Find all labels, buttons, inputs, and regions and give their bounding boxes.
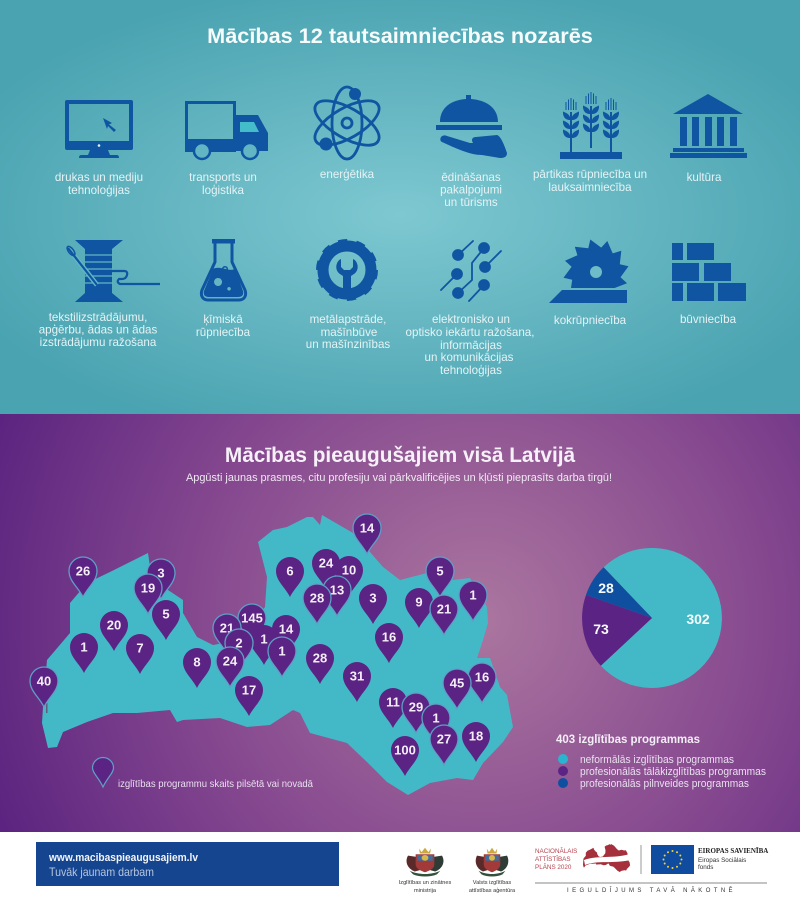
- label: electronics and ICT: tehnoloģijas: [440, 364, 502, 377]
- pin: 26: [69, 557, 97, 597]
- pin: 40: [30, 667, 58, 707]
- pin: 20: 20: [107, 618, 121, 632]
- pin: 6: [276, 557, 304, 597]
- label: chemical industry: rūpniecība: [196, 326, 251, 339]
- pin: 8: [183, 648, 211, 688]
- pin: 1: [250, 625, 278, 665]
- icon: flask: [201, 239, 246, 300]
- logo: EU flag: EIROPAS SAVIENĪBA: [698, 847, 768, 855]
- pin: 3: 3: [369, 590, 377, 606]
- pin: 26: 26: [76, 564, 90, 578]
- pin: 17: 17: [242, 682, 256, 698]
- icon: saw blade: [549, 240, 628, 303]
- label: culture: kultūra: [687, 171, 722, 184]
- pin: 14: [353, 514, 381, 554]
- pin: 1: [459, 581, 487, 621]
- pin: 8: 8: [193, 654, 201, 670]
- pin: 28: 28: [310, 590, 324, 606]
- pin: 1: [70, 633, 98, 673]
- label: catering and tourism: un tūrisms: [444, 196, 498, 209]
- map legend: [92, 758, 313, 790]
- pin: 13: 13: [330, 582, 344, 598]
- website bar: [36, 842, 339, 886]
- pin: 1: [268, 637, 296, 677]
- pin: 9: [405, 588, 433, 628]
- pin: 19: 19: [141, 580, 155, 596]
- subheading: Apgūsti jaunas prasmes, citu profesiju vai pārkvalificējies un kļūsti pieprasīts darba tirgū!: [186, 472, 612, 484]
- pin: 18: [462, 722, 490, 762]
- pie chart: 302: [686, 611, 710, 627]
- footer: [0, 832, 800, 903]
- pin: 14: 14: [279, 622, 294, 636]
- icon: wheat: [560, 92, 622, 159]
- pin: 1: 1: [469, 588, 477, 602]
- pin: 100: [391, 736, 419, 776]
- pin: 145: [238, 604, 266, 644]
- pin: 2: 2: [235, 636, 243, 650]
- pin: 27: 27: [437, 732, 451, 746]
- pin: 21: 21: [220, 620, 234, 636]
- logo: national development plan: [535, 844, 631, 872]
- pin: 145: 145: [241, 610, 263, 626]
- pin: 20: [100, 611, 128, 651]
- pin: 1: 1: [432, 710, 440, 726]
- pin: 6: 6: [286, 564, 294, 578]
- icon: bricks: [672, 243, 746, 301]
- pin: 5: 5: [436, 564, 444, 578]
- logo: national development plan: PLĀNS 2020: [535, 863, 572, 871]
- pie legend: neformālās izglītības programmas: [580, 754, 734, 766]
- pin: 28: [306, 644, 334, 684]
- pin: 16: 16: [382, 630, 396, 644]
- label: textiles: izstrādājumu ražošana: [40, 336, 157, 349]
- logo: EU flag: Eiropas Sociālais: [698, 857, 746, 864]
- heading: Mācības pieaugušajiem visā Latvijā: [225, 444, 576, 467]
- label: metalworking: metālapstrāde,: [310, 313, 386, 326]
- icon: classical building: [670, 94, 747, 158]
- pie legend: profesionālās tālākizglītības programmas: [580, 766, 766, 778]
- pin: 9: 9: [415, 594, 423, 610]
- icon: food service: [436, 95, 507, 158]
- logo: agency: [469, 848, 516, 894]
- pin: 45: [443, 669, 471, 709]
- map of Latvia with pins: [30, 514, 513, 795]
- label: wood industry: kokrūpniecība: [554, 314, 627, 327]
- pin: 11: [379, 688, 407, 728]
- pie legend: [556, 732, 766, 790]
- panel: adult learning across Latvia: [0, 414, 800, 832]
- logo: agency: attīstības aģentūra: [469, 887, 516, 894]
- pin: 31: 31: [350, 668, 364, 684]
- logo: national development plan: ATTĪSTĪBAS: [535, 855, 571, 863]
- label: chemical industry: ķīmiskā: [203, 313, 243, 326]
- pie chart: 28: [598, 580, 614, 596]
- label: food industry and agriculture: pārtikas rūpniecība un: [533, 168, 647, 181]
- icon: circuit: [441, 241, 501, 301]
- pie legend: profesionālās pilnveides programmas: [580, 778, 749, 790]
- logo: ministry: ministrija: [414, 888, 437, 894]
- label: food industry and agriculture: lauksaimniecība: [548, 181, 632, 194]
- logo: EU flag: [640, 845, 768, 874]
- pin: 100: 100: [394, 742, 416, 758]
- label: transport: transports un: [189, 171, 257, 184]
- pin: 3: [359, 584, 387, 624]
- pin: 17: [235, 676, 263, 716]
- pin: 3: [147, 559, 175, 599]
- pin: 5: [152, 600, 180, 640]
- pin: 24: [216, 647, 244, 687]
- icon: gear and wrench: [320, 242, 374, 298]
- pin: 19: [134, 574, 162, 614]
- label: electronics and ICT: informācijas: [440, 339, 502, 352]
- icon: truck: [185, 102, 268, 159]
- pin: 21: [430, 595, 458, 635]
- label: catering and tourism: ēdināšanas: [441, 171, 501, 184]
- pin: 7: [126, 634, 154, 674]
- pin: 13: [323, 576, 351, 616]
- pin: 5: 5: [162, 606, 170, 622]
- pin: 2: [225, 629, 253, 669]
- pin: 1: 1: [80, 640, 88, 654]
- website bar: Tuvāk jaunam darbam: [49, 865, 154, 879]
- panel: 12 sectors: [0, 0, 800, 414]
- pin: 21: 21: [437, 602, 451, 616]
- logo: ministry: [399, 848, 451, 894]
- logo: agency: Valsts izglītības: [473, 880, 511, 886]
- pin: 27: [430, 725, 458, 765]
- pin: 31: [343, 662, 371, 702]
- pin: 1: [422, 704, 450, 744]
- logo: national development plan: NACIONĀLAIS: [535, 848, 577, 855]
- label: construction: būvniecība: [680, 313, 737, 326]
- pin: 28: 28: [313, 650, 327, 666]
- pie legend: 403 izglītības programmas: [556, 732, 700, 746]
- pin: 1: 1: [260, 632, 268, 646]
- pin: 28: [303, 584, 331, 624]
- label: textiles: apģērbu, ādas un ādas: [39, 324, 158, 336]
- pin: 3: 3: [157, 566, 165, 580]
- pin: 16: 16: [475, 670, 489, 684]
- pin: 1: 1: [278, 644, 286, 658]
- pin: 29: [402, 693, 430, 733]
- pin: 14: [272, 615, 300, 655]
- pin: 10: [335, 556, 363, 596]
- label: print and media: drukas un mediju: [55, 171, 143, 184]
- pie chart: 73: [593, 621, 609, 637]
- logo: ministry: Izglītības un zinātnes: [399, 880, 451, 886]
- pin: 16: [375, 623, 403, 663]
- pin: 14: 14: [360, 520, 375, 536]
- icon: atom: [308, 87, 386, 159]
- label: energy: enerģētika: [320, 168, 375, 181]
- pin: 16: [468, 663, 496, 703]
- website bar: www.macibaspieaugusajiem.lv: [48, 852, 199, 864]
- map legend: izglītības programmu skaits pilsētā vai novadā: [118, 779, 313, 790]
- label: catering and tourism: pakalpojumi: [440, 184, 502, 196]
- pin: 24: 24: [223, 654, 238, 668]
- title: Mācības 12 tautsaimniecības nozarēs: [207, 23, 593, 48]
- label: print and media: tehnoloģijas: [68, 184, 130, 197]
- logo: EU flag: fonds: [698, 864, 713, 871]
- label: textiles: tekstilizstrādājumu,: [49, 311, 147, 324]
- pin: 10: 10: [342, 562, 356, 578]
- label: electronics and ICT: un komunikācijas: [425, 351, 514, 364]
- label: transport: loģistika: [202, 184, 244, 197]
- pin: 21: [213, 614, 241, 654]
- icon: spool and needle: [66, 240, 160, 302]
- pin: 5: [426, 557, 454, 597]
- pin: 29: 29: [409, 700, 423, 714]
- pin: 45: 45: [450, 676, 464, 690]
- slogan: IEGULDĪJUMS TAVĀ NĀKOTNĒ: [567, 887, 736, 894]
- label: electronics and ICT: elektronisko un: [432, 313, 510, 326]
- pie chart: [582, 548, 722, 688]
- pin: 40: 40: [37, 674, 51, 688]
- label: metalworking: un mašīnzinības: [306, 338, 390, 351]
- pin: 24: 24: [319, 556, 334, 570]
- pin: 18: 18: [469, 728, 483, 744]
- label: electronics and ICT: optisko iekārtu ražošana,: [406, 326, 534, 339]
- icon: monitor: [65, 100, 133, 158]
- label: metalworking: mašīnbūve: [321, 326, 377, 339]
- pin: 11: 11: [386, 694, 400, 710]
- pin: 24: [312, 549, 340, 589]
- pin: 7: 7: [136, 640, 144, 656]
